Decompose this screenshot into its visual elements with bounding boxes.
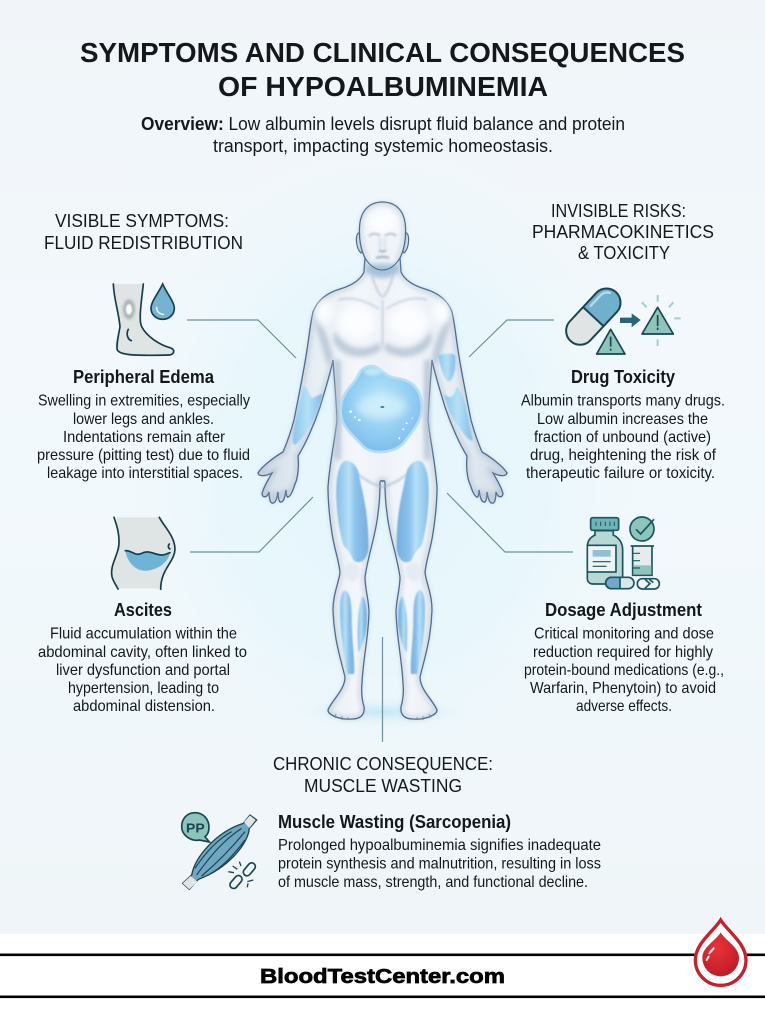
dosage adjustment text — [524, 600, 724, 715]
overview text: transport, impacting systemic homeostasis. — [213, 136, 553, 156]
peripheral edema text — [37, 367, 250, 482]
heading: visible symptoms: FLUID REDISTRIBUTION — [44, 233, 243, 253]
title: SYMPTOMS AND CLINICAL CONSEQUENCES — [80, 37, 685, 68]
ascites text — [38, 600, 247, 715]
thigh and calf fluid — [336, 461, 429, 674]
heading: chronic consequence: MUSCLE WASTING — [304, 776, 462, 796]
muscle wasting text: Muscle Wasting (Sarcopenia) — [278, 812, 511, 832]
drug toxicity text — [521, 367, 725, 482]
drug toxicity text: fraction of unbound (active) — [534, 429, 711, 446]
heading: visible symptoms — [44, 211, 243, 253]
connector: peripheral edema — [187, 320, 296, 358]
drug toxicity text: Low albumin increases the — [537, 411, 708, 428]
overview text — [141, 114, 625, 156]
face — [338, 234, 427, 487]
peripheral edema text: pressure (pitting test) due to fluid — [37, 447, 250, 464]
drug toxicity text: Albumin transports many drugs. — [521, 392, 725, 410]
peripheral edema text: leakage into interstitial spaces. — [47, 465, 243, 482]
footer band: BloodTestCenter.com — [260, 966, 505, 988]
dosage adjustment text: Critical monitoring and dose — [534, 626, 714, 642]
human body figure — [258, 202, 507, 728]
ears — [356, 233, 409, 253]
drug toxicity text: Drug Toxicity — [571, 367, 675, 387]
heading: invisible risks: & TOXICITY — [578, 243, 670, 263]
soft muscle shadows — [313, 264, 452, 460]
jawline — [365, 258, 400, 270]
overview text: Overview: Low albumin levels disrupt fluid balance and protein — [141, 114, 625, 134]
dosage adjustment text: Dosage Adjustment — [545, 600, 702, 620]
peripheral edema text: Swelling in extremities, especially — [38, 392, 250, 410]
heading: visible symptoms: VISIBLE SYMPTOMS: — [55, 211, 229, 231]
dosage adjustment text: adverse effects. — [576, 698, 672, 715]
muscle wasting text: protein synthesis and malnutrition, resulting in loss — [278, 856, 601, 872]
peripheral edema text: Indentations remain after — [63, 429, 226, 446]
peripheral edema text: Peripheral Edema — [73, 367, 215, 387]
icon: swollen foot with water drop — [113, 284, 174, 355]
dosage adjustment text: protein-bound medications (e.g., — [524, 662, 724, 679]
connector: drug toxicity — [469, 320, 554, 357]
title: OF HYPOALBUMINEMIA — [218, 71, 548, 102]
ascites text: hypertension, leading to — [68, 680, 219, 697]
muscle wasting text: of muscle mass, strength, and functional decline. — [278, 874, 588, 891]
heading: chronic consequence: CHRONIC CONSEQUENCE: — [273, 754, 493, 774]
icon: blood drop logo — [695, 920, 746, 985]
heading: invisible risks — [532, 201, 714, 263]
ascites text: Fluid accumulation within the — [50, 626, 237, 642]
muscle wasting text — [278, 812, 601, 891]
ascites text: abdominal cavity, often linked to — [38, 644, 247, 661]
icon: medicine bottle, beaker and pills — [587, 517, 659, 589]
peripheral edema text: lower legs and ankles. — [73, 411, 214, 428]
icon: capsule with warning triangles — [560, 283, 681, 354]
drug toxicity text: drug, heightening the risk of — [530, 447, 717, 464]
icon: muscle with PP bubble and broken chain: PP — [186, 820, 205, 835]
title — [80, 37, 685, 102]
ascites text: abdominal distension. — [73, 698, 215, 715]
knee highlights — [344, 562, 421, 581]
ascites text: Ascites — [114, 600, 172, 620]
ascites text: liver dysfunction and portal — [56, 662, 230, 679]
icon: muscle with PP bubble and broken chain — [182, 813, 257, 890]
connector: ascites — [190, 497, 313, 552]
heading: invisible risks: INVISIBLE RISKS: — [551, 201, 686, 221]
muscle wasting text: Prolonged hypoalbuminemia signifies inadequate — [278, 837, 601, 854]
foot toes — [335, 714, 430, 720]
heading: invisible risks: PHARMACOKINETICS — [532, 222, 714, 242]
icon: abdomen with fluid — [112, 517, 175, 589]
inner shading — [258, 202, 507, 719]
dosage adjustment text: reduction required for highly — [533, 644, 713, 661]
heading: chronic consequence — [273, 754, 493, 796]
connector: dosage adjustment — [447, 493, 573, 552]
chest and shoulder highlights — [316, 209, 449, 338]
abdomen fluid — [293, 354, 473, 452]
connector: muscle wasting — [382, 637, 384, 742]
arm fluid — [293, 354, 473, 445]
dosage adjustment text: Warfarin, Phenytoin) to avoid — [530, 680, 716, 697]
drug toxicity text: therapeutic failure or toxicity. — [526, 465, 715, 482]
